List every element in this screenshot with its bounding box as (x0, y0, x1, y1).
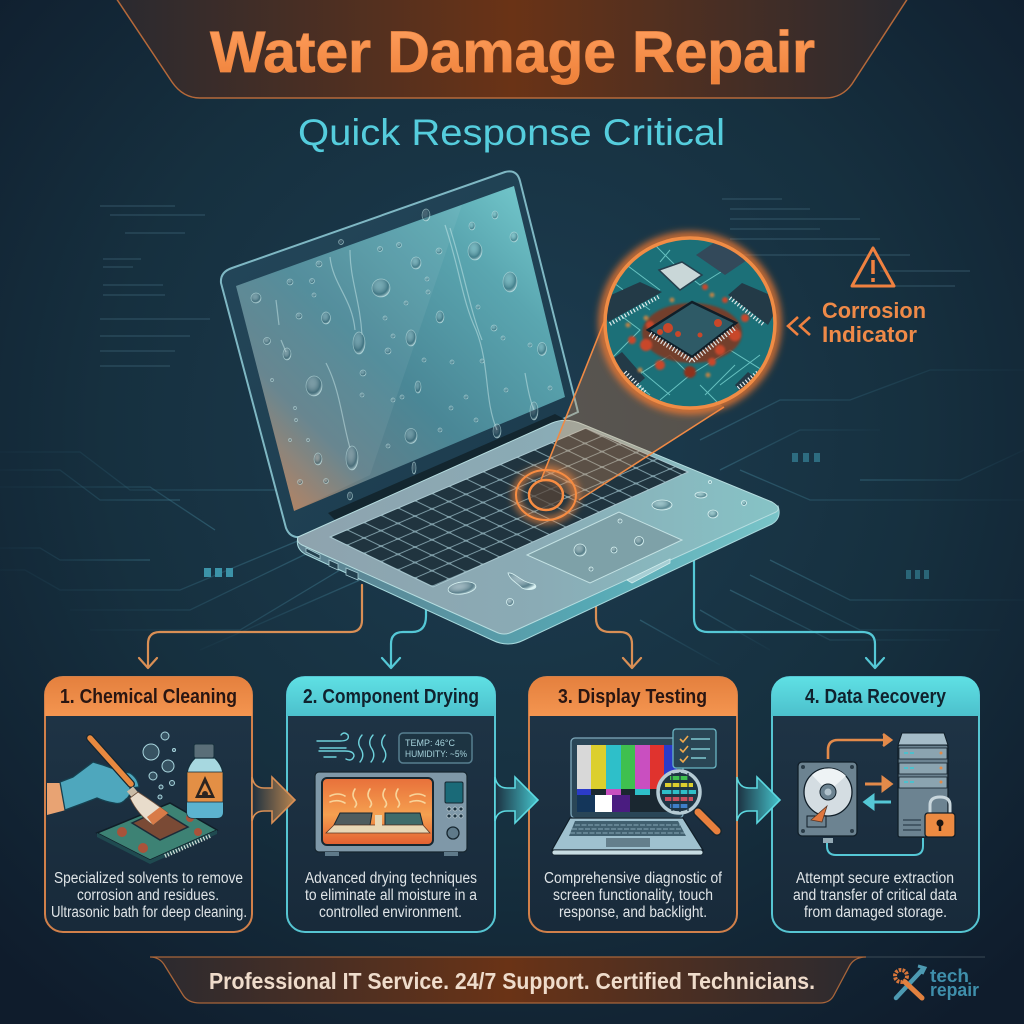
icon: cable (827, 838, 923, 855)
arrow: step 3 to 4 (737, 777, 780, 823)
corrosion stains (626, 284, 749, 378)
keyboard (330, 428, 688, 587)
icon: circuit board (97, 803, 217, 864)
logo (895, 966, 979, 1000)
base ports (306, 548, 358, 580)
screen reflection (236, 205, 462, 511)
card 2 description (305, 870, 477, 921)
card 4 description (793, 870, 957, 921)
subtitle: Quick Response Critical (298, 112, 725, 153)
connector 2 (382, 600, 426, 668)
panel: display testing (529, 677, 737, 932)
icon: brush (90, 738, 168, 825)
arrow: step 2 to 3 (495, 777, 538, 823)
title: Water Damage Repair (210, 20, 815, 85)
icon: padlock (925, 797, 955, 837)
card 1 description: Ultrasonic bath for deep cleaning. (51, 904, 247, 921)
icon: sensor readout (399, 733, 472, 763)
board traces (614, 246, 760, 402)
icon: skin arm (47, 783, 66, 815)
icon: solvent bottle (187, 744, 223, 818)
laptop screen (236, 186, 565, 511)
card 3 description: screen functionality, touch (553, 887, 713, 904)
icon: orange transfer arrow top (828, 734, 891, 759)
card 4 description: and transfer of critical data (793, 887, 957, 904)
card 1 heading: 1. Chemical Cleaning (60, 685, 237, 708)
connector 4 (694, 560, 884, 668)
screen water streaks (276, 225, 534, 448)
card 3 description: Comprehensive diagnostic of (544, 870, 723, 887)
card 3 header (529, 677, 737, 716)
corrosion indicator label (822, 298, 926, 347)
connector lines from laptop to cards (139, 560, 884, 668)
chip corrosion (657, 319, 722, 338)
warning triangle icon (852, 248, 894, 286)
laptop hinge (328, 414, 566, 523)
title banner (116, 0, 908, 98)
card 3 description (544, 870, 723, 921)
magnifier ring (605, 238, 775, 408)
laptop base top (298, 420, 778, 634)
icon: airflow (317, 733, 386, 762)
icon: gloved hand (60, 762, 139, 810)
icon: cyan transfer arrow (865, 796, 891, 808)
card 3 description: response, and backlight. (559, 904, 707, 921)
connector 3 (596, 603, 641, 668)
card 1 description: corrosion and residues. (77, 887, 219, 904)
corrosion ring on keyboard (516, 470, 576, 520)
footer top rule (866, 956, 985, 958)
central chip pins (650, 327, 736, 361)
panel: chemical cleaning (45, 677, 252, 932)
icon: sensor readout: TEMP: 46°C (405, 738, 455, 749)
corrosion indicator label: Corrosion (822, 298, 926, 323)
icon: checklist (673, 729, 716, 768)
icon: server (898, 733, 948, 837)
arrow: step 1 to 2 (252, 777, 295, 823)
icon: orange transfer arrow (865, 778, 891, 790)
card 3 heading: 3. Display Testing (558, 685, 707, 708)
card 4 body (772, 677, 979, 932)
touchpad (527, 512, 682, 583)
footer banner (150, 957, 866, 1003)
card 2 description: Advanced drying techniques (305, 870, 477, 887)
capacitor (659, 262, 702, 290)
card 4 heading: 4. Data Recovery (805, 685, 947, 708)
card 3 body (529, 677, 737, 932)
icon: hard drive (798, 762, 857, 843)
card 4 header (772, 677, 979, 716)
laptop lid (221, 171, 578, 537)
logo text (930, 966, 979, 1000)
card 2 heading: 2. Component Drying (303, 685, 479, 708)
footer text: Professional IT Service. 24/7 Support. Certified Technicians. (209, 968, 815, 994)
base water drops (447, 480, 746, 606)
side latch (627, 559, 670, 583)
panel: component drying (287, 677, 495, 932)
laptop base front edge (297, 506, 779, 644)
connector 1 (139, 585, 362, 668)
card 4 description: from damaged storage. (804, 904, 947, 921)
magnifier beam (541, 317, 724, 500)
corner chips (607, 243, 773, 390)
corrosion ring glow (516, 470, 576, 520)
central chip (648, 302, 736, 357)
icon: drying oven (315, 772, 467, 856)
card 1 body (45, 677, 252, 932)
laptop (221, 171, 779, 644)
logo text: repair (930, 980, 979, 1000)
card 1 header (45, 677, 252, 716)
background circuit traces left (0, 452, 360, 650)
icon: test laptop (552, 738, 703, 855)
card 2 description: to eliminate all moisture in a (305, 887, 477, 904)
screen water drops (251, 209, 552, 500)
background circuit traces right (640, 370, 1024, 665)
icon: magnifying glass (658, 771, 717, 831)
logo text: tech (930, 966, 969, 986)
icon: sensor readout: HUMIDITY: ~5% (405, 749, 467, 760)
logo icon: gear and wrench (895, 966, 925, 998)
magnifier: corroded circuit board (606, 240, 774, 406)
card 4 description: Attempt secure extraction (796, 870, 954, 887)
beam edges (541, 317, 724, 500)
corrosion chevrons (788, 317, 810, 335)
icon: bubbles (143, 732, 176, 799)
card 1 description: Specialized solvents to remove (54, 870, 243, 887)
card 1 description (51, 870, 247, 921)
magnifier glow (603, 236, 777, 410)
background code text lines (100, 198, 970, 367)
card 2 header (287, 677, 495, 716)
chip pins (610, 296, 764, 392)
corrosion indicator label: Indicator (822, 322, 917, 347)
panel: data recovery (772, 677, 979, 932)
card 2 body (287, 677, 495, 932)
card 2 description: controlled environment. (319, 904, 462, 921)
background small squares (204, 453, 929, 579)
